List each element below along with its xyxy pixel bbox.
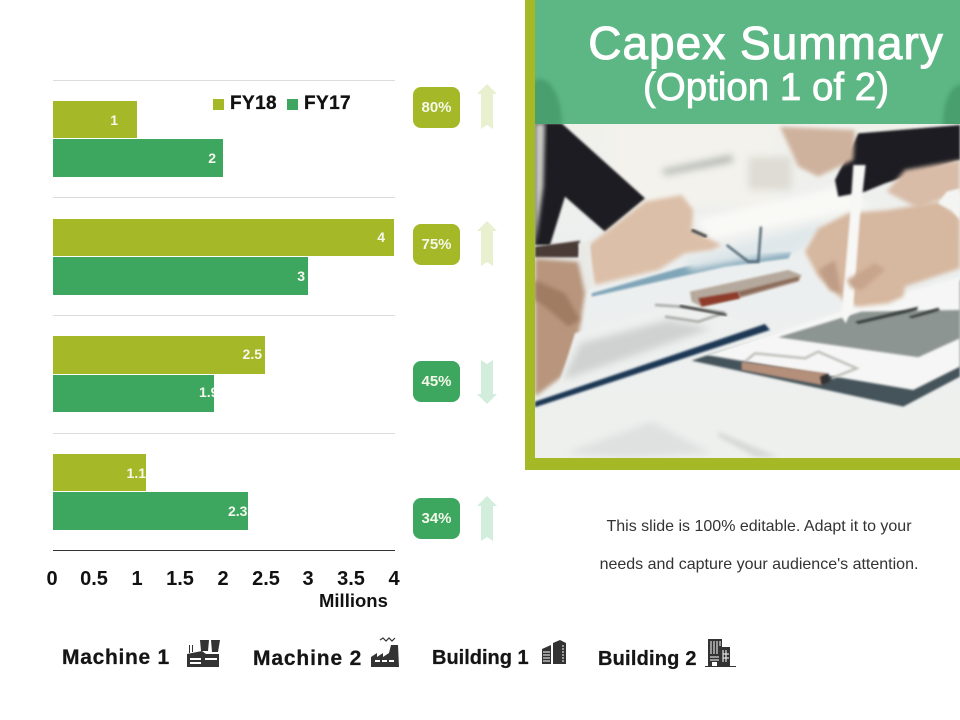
x axis tick labels: 3 [302, 568, 314, 590]
arrow: up, 80% [477, 84, 497, 129]
title: Capex Summary (Option 1 of 2): (Option 1 of 2) [643, 66, 889, 109]
category: Machine 2: Machine 2 [253, 647, 362, 670]
chart: capex bar chart [53, 80, 395, 551]
title band [535, 0, 960, 124]
change badge: 75%: 75% [421, 236, 452, 253]
icon: office building [542, 640, 566, 664]
left suit [535, 123, 645, 245]
x axis tick labels: 2.5 [252, 568, 280, 590]
glasses [727, 227, 761, 262]
bar: Machine 1 FY17 [53, 139, 223, 177]
category: Building 2 [598, 639, 736, 670]
arrow: up, 75% [477, 221, 497, 266]
bar: Machine 2 FY18 [53, 219, 394, 256]
category: Building 2: Building 2 [598, 648, 697, 670]
arrow: up, 34% [477, 496, 497, 541]
x axis tick labels: 2 [217, 568, 229, 590]
value label: 4: 4 [377, 229, 385, 245]
soft background [608, 120, 775, 207]
x axis tick labels: 3.5 [337, 568, 365, 590]
far paper strip & blue edge [592, 252, 792, 297]
bar: Building 1 FY17 [53, 375, 214, 412]
x axis tick labels: 0 [46, 568, 58, 590]
value label: 2.3: 2.3 [228, 503, 247, 519]
icon: factory with smoke [371, 637, 399, 667]
change badge: 45%: 45% [421, 373, 452, 390]
front left hand [535, 258, 585, 397]
icon: city buildings [705, 639, 736, 667]
text block: editable slide note [600, 518, 918, 573]
category: Building 1 [432, 640, 566, 669]
legend: FY18 and FY17: FY17 [304, 93, 351, 114]
icon: factory with cooling towers [187, 640, 220, 667]
text block: editable slide note: This slide is 100% editable. Adapt it to your [606, 518, 912, 535]
value label: 3: 3 [297, 268, 305, 284]
x axis tick labels [46, 568, 400, 590]
x axis tick labels: 1.5 [166, 568, 194, 590]
legend: FY18 and FY17 [213, 93, 351, 114]
bar: Machine 2 FY17 [53, 257, 308, 295]
bar: Machine 1 FY18 [53, 101, 137, 138]
legend: FY18 and FY17: FY18 [230, 93, 277, 114]
category: Building 1: Building 1 [432, 647, 529, 669]
axis title: Millions: Millions [319, 590, 388, 611]
panel: photo of business meeting with olive frame [525, 0, 960, 470]
bar: Building 1 FY18 [53, 336, 265, 374]
top hand and sleeve [835, 125, 960, 197]
category: Machine 1: Machine 1 [62, 646, 170, 669]
category: Machine 1 [62, 640, 220, 669]
foreground document text [578, 424, 702, 458]
right clipboard [692, 280, 960, 407]
change badge: 34% [413, 498, 460, 539]
value label: 2.5: 2.5 [243, 346, 262, 362]
arrow: down, 45% [477, 360, 497, 404]
right hand [805, 202, 960, 307]
value label: 1: 1 [110, 112, 118, 128]
bar: Building 2 FY18 [53, 454, 146, 491]
title: Capex Summary (Option 1 of 2): Capex Summary [588, 17, 944, 69]
text block: editable slide note: needs and capture your audience's attention. [600, 556, 918, 573]
change badge: 34%: 34% [421, 510, 452, 527]
left hand [587, 195, 722, 285]
bar: Building 2 FY17 [53, 492, 248, 530]
value label: 1.1: 1.1 [127, 465, 146, 481]
left document [560, 331, 582, 380]
x axis tick labels: 0.5 [80, 568, 108, 590]
change badge: 80%: 80% [421, 99, 452, 116]
x axis tick labels: 4 [388, 568, 400, 590]
red pen [690, 270, 802, 307]
x axis tick labels: 1 [131, 568, 143, 590]
change badge: 45% [413, 361, 460, 402]
category: Machine 2 [253, 637, 399, 670]
white pen [842, 165, 866, 323]
title: Capex Summary (Option 1 of 2) [588, 17, 944, 109]
value label: 2: 2 [208, 150, 216, 166]
change badge: 80% [413, 87, 460, 128]
change badge: 75% [413, 224, 460, 265]
